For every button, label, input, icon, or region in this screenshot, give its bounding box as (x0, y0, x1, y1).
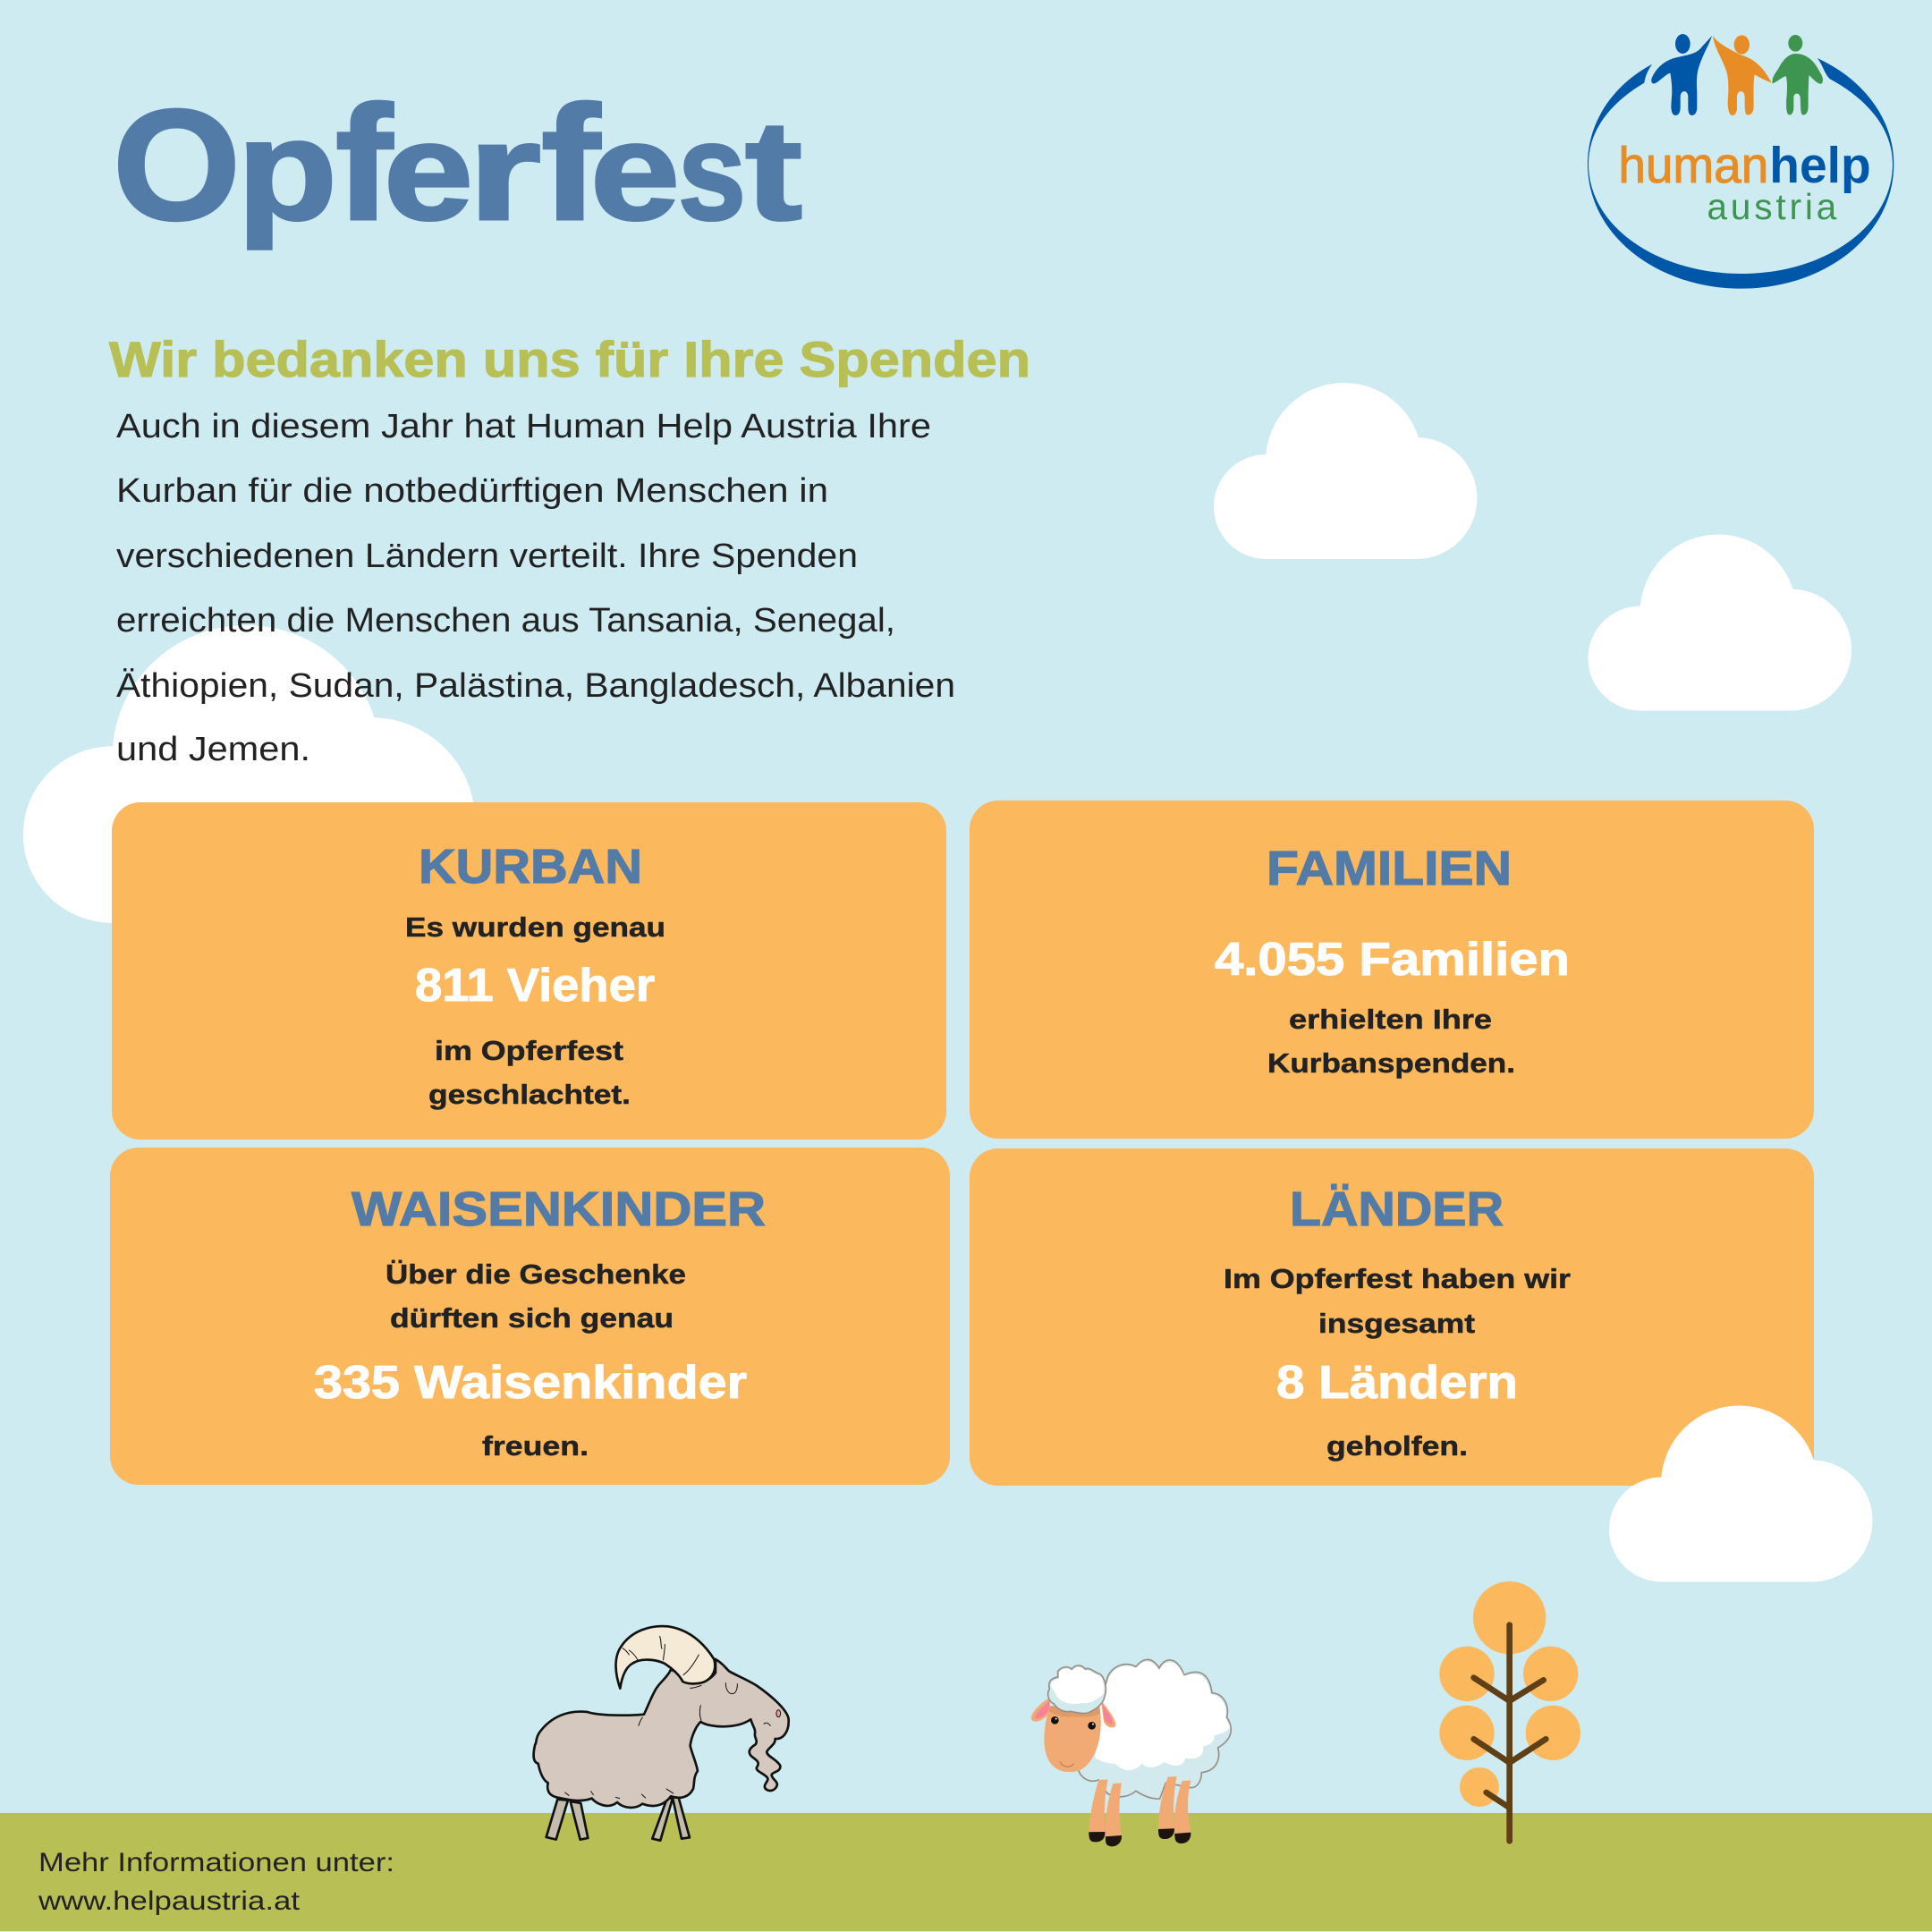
sheep wool highlight (1095, 1662, 1230, 1770)
sheep ears (1031, 1698, 1115, 1727)
title: r (468, 94, 541, 249)
cloud: large left behind text (23, 625, 475, 923)
body paragraph: Auch in diesem Jahr hat Human Help Austria Ihre (116, 408, 931, 445)
Länder text top: insgesamt (1318, 1308, 1475, 1339)
body paragraph (116, 408, 955, 768)
Länder heading: LÄNDER (1290, 1182, 1504, 1236)
title: O (113, 78, 241, 253)
body paragraph: und Jemen. (116, 731, 310, 768)
logo swoosh (1588, 58, 1894, 289)
Waisenkinder text top: dürften sich genau (390, 1302, 674, 1334)
goat legs (547, 1796, 690, 1841)
Länder text top: Im Opferfest haben wir (1224, 1263, 1571, 1294)
logo wordmark human: human (1618, 138, 1768, 194)
body paragraph: verschiedenen Ländern verteilt. Ihre Spenden (116, 538, 858, 575)
subheading: Wir bedanken uns für Ihre Spenden (109, 331, 1030, 387)
goat body (534, 1659, 789, 1808)
Kurban number: 811 Vieher (415, 960, 655, 1012)
Kurban text top: Es wurden genau (405, 911, 665, 943)
logo: human help austria (1588, 34, 1894, 289)
goat horn (616, 1626, 715, 1689)
panel: Kurban (112, 802, 946, 1140)
Waisenkinder text bottom: freuen. (482, 1430, 589, 1462)
Waisenkinder text top: Über die Geschenke (386, 1258, 686, 1290)
panel: Familien (970, 801, 1814, 1139)
title: e (384, 94, 473, 249)
cloud: upper centre (1214, 383, 1478, 559)
cloud: upper right (1589, 535, 1852, 710)
Waisenkinder text top (386, 1258, 686, 1334)
Familien text: Kurbanspenden. (1267, 1047, 1515, 1079)
illustration: tree (1439, 1581, 1580, 1841)
panel: Waisenkinder (110, 1148, 950, 1485)
title: e (590, 94, 680, 249)
Länder text bottom: geholfen. (1326, 1430, 1468, 1462)
Waisenkinder number: 335 Waisenkinder (314, 1357, 747, 1409)
Länder number: 8 Ländern (1276, 1357, 1518, 1409)
body paragraph: Kurban für die notbedürftigen Menschen in (116, 472, 828, 510)
body paragraph: erreichten die Menschen aus Tansania, Senegal, (116, 602, 895, 640)
title: f (335, 72, 393, 254)
sheep wool body (1079, 1659, 1231, 1799)
footer text (38, 1848, 394, 1916)
tree trunk and branches (1474, 1625, 1546, 1841)
footer text: Mehr Informationen unter: (38, 1848, 394, 1877)
tree foliage (1439, 1581, 1580, 1807)
Familien text (1267, 1004, 1515, 1079)
title: f (541, 72, 600, 254)
sheep head wool (1048, 1665, 1106, 1714)
logo wordmark help: help (1769, 138, 1871, 194)
cloud: lower right over card (1609, 1406, 1873, 1581)
Kurban text bottom: im Opferfest (435, 1035, 623, 1066)
ground band (0, 1813, 1932, 1931)
illustration: goat (534, 1626, 789, 1841)
logo blue figure (1651, 34, 1712, 115)
sheep face (1044, 1704, 1101, 1772)
footer text: www.helpaustria.at (38, 1886, 301, 1916)
Familien number: 4.055 Familien (1215, 934, 1570, 986)
title: t (745, 92, 802, 250)
goat face details (565, 1636, 770, 1799)
sheep mouth (1060, 1761, 1074, 1767)
sheep legs (1089, 1776, 1191, 1836)
title: p (237, 89, 337, 250)
Kurban text bottom (428, 1035, 631, 1110)
logo wordmark austria: austria (1707, 186, 1837, 227)
sheep eyes (1051, 1716, 1096, 1730)
Waisenkinder heading: WAISENKINDER (352, 1182, 766, 1236)
Familien text: erhielten Ihre (1289, 1004, 1492, 1035)
title: s (678, 94, 746, 249)
panel: Länder (970, 1148, 1814, 1486)
logo green figure (1772, 35, 1823, 114)
Familien heading: FAMILIEN (1267, 842, 1512, 895)
logo orange figure (1713, 35, 1772, 115)
Länder text top (1224, 1263, 1571, 1339)
Kurban text bottom: geschlachtet. (428, 1079, 631, 1110)
goat nostril (776, 1710, 781, 1717)
illustration: sheep (1031, 1659, 1231, 1846)
sheep hooves (1089, 1828, 1191, 1846)
body paragraph: Äthiopien, Sudan, Palästina, Bangladesch, Albanien (116, 667, 955, 705)
Kurban heading: KURBAN (419, 840, 642, 894)
